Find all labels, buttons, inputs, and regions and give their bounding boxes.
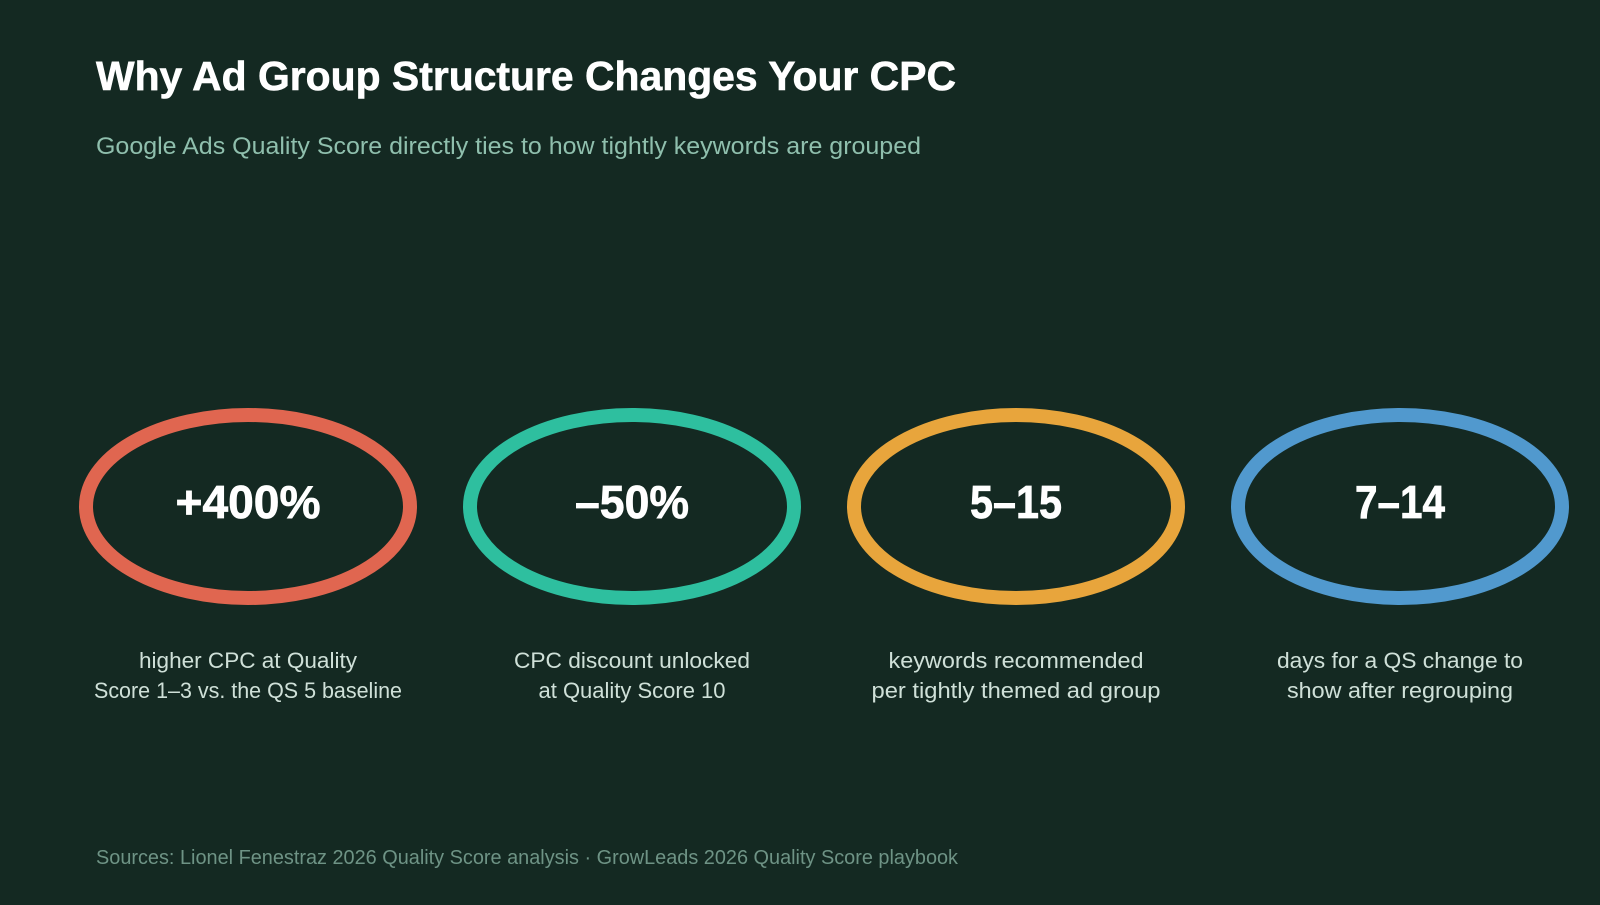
panel: keywords per ad group stat [854,415,1178,703]
ring: red [86,415,410,598]
ring: blue [1238,415,1562,598]
ring: orange [854,415,1178,598]
caption: days: show after regrouping [1287,678,1513,703]
caption: days [1277,648,1523,703]
caption: CPC discount: CPC discount unlocked [514,648,750,673]
panel: higher CPC stat [86,415,410,703]
caption: CPC discount [514,648,750,703]
caption: higher CPC: Score 1–3 vs. the QS 5 baseline [94,678,402,703]
caption: CPC discount: at Quality Score 10 [538,678,726,703]
ring: teal [470,415,794,598]
caption: higher CPC [94,648,402,703]
caption: keywords: keywords recommended [888,648,1144,673]
number: 5-15: 5–15 [970,476,1062,528]
subtitle: Google Ads Quality Score directly ties to how tightly keywords are grouped [96,133,921,160]
caption: keywords [872,648,1160,703]
number: +400%: +400% [176,476,320,528]
caption: higher CPC: higher CPC at Quality [139,648,358,673]
caption: keywords: per tightly themed ad group [872,678,1160,703]
title: Why Ad Group Structure Changes Your CPC [96,53,956,99]
sources footnote: Sources: Lionel Fenestraz 2026 Quality Score analysis · GrowLeads 2026 Quality Score playbook [96,846,959,869]
panel: CPC discount stat [470,415,794,703]
caption: days: days for a QS change to [1277,648,1523,673]
number: -50%: –50% [575,476,689,528]
panel: days to show change stat [1238,415,1562,703]
number: 7-14: 7–14 [1355,476,1445,528]
